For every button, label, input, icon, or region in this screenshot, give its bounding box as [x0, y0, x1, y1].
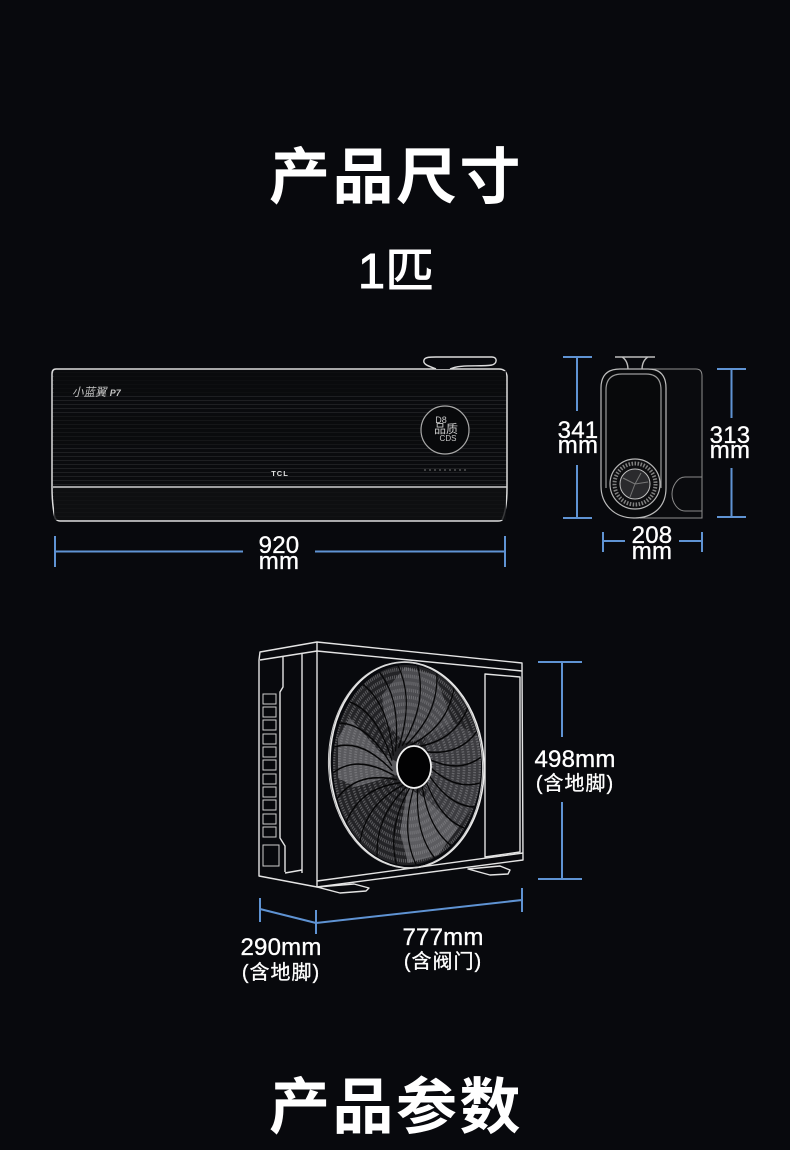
dimension: 290 mm: (含地脚): [242, 961, 320, 984]
fan rim: [325, 658, 489, 872]
dimension: 777 mm: (含阀门): [404, 950, 482, 973]
dimension: 920 mm: mm: [259, 548, 299, 575]
dimension: 498 mm: [534, 662, 616, 879]
outer loop: [601, 369, 666, 518]
brand logo: 小蓝翼 P7: [72, 386, 122, 399]
lower panel divider: [53, 486, 507, 488]
dimension: 208 mm: [603, 522, 702, 565]
grille hatching: [333, 667, 481, 863]
dimension: 341 mm: [558, 357, 598, 518]
fan: [328, 661, 484, 869]
lower arch: [672, 477, 702, 511]
display circle: D8: [435, 415, 447, 425]
dimension: 341 mm: mm: [558, 432, 598, 459]
dimension: 777 mm: 777mm: [402, 924, 484, 951]
feet: [317, 866, 510, 893]
right side panel: [485, 674, 520, 857]
dimension: 208 mm: mm: [632, 538, 672, 565]
display circle: CDS: [440, 434, 456, 443]
indoor unit front view: [52, 357, 507, 521]
outdoor unit: [259, 642, 523, 893]
fan wheel: [610, 459, 660, 509]
dimension: 313 mm: mm: [710, 437, 750, 464]
lower side box: [263, 845, 279, 866]
indicator row: [424, 469, 466, 471]
heading: product parameters: 产品参数: [269, 1073, 523, 1141]
display circle: [421, 406, 469, 454]
side panel: [280, 654, 302, 873]
top stand: [424, 357, 496, 369]
casing: [259, 642, 523, 887]
dimension: 313 mm: 313: [710, 422, 750, 449]
dimension: 290 mm: [240, 898, 322, 984]
dimension: 208 mm: 208: [632, 522, 672, 549]
dimension: 313 mm: [710, 369, 750, 517]
indoor unit side view: [601, 357, 702, 518]
dimension: 290 mm: 290mm: [240, 934, 322, 961]
vent slots: [263, 694, 276, 837]
grille lines: [333, 666, 481, 864]
unit body: [52, 369, 507, 521]
inner loop: [606, 374, 661, 488]
dimension: 341 mm: 341: [558, 417, 598, 444]
top stand: [615, 357, 655, 370]
dimension: 498 mm: 498mm: [534, 746, 616, 773]
dimension: 498 mm: (含地脚): [536, 772, 614, 795]
fan hub: [397, 746, 431, 788]
body outline: [640, 369, 702, 518]
title: product size: 产品尺寸: [269, 143, 523, 211]
dimension: 920 mm: [55, 532, 505, 575]
fan blades: [338, 667, 485, 863]
TCL logo: TCL: [271, 469, 289, 478]
display circle: 品质: [434, 422, 458, 436]
subtitle: 1 hp: 1匹: [358, 245, 434, 299]
dimension: 777 mm: [316, 888, 522, 973]
dimension: 920 mm: 920: [259, 532, 299, 559]
